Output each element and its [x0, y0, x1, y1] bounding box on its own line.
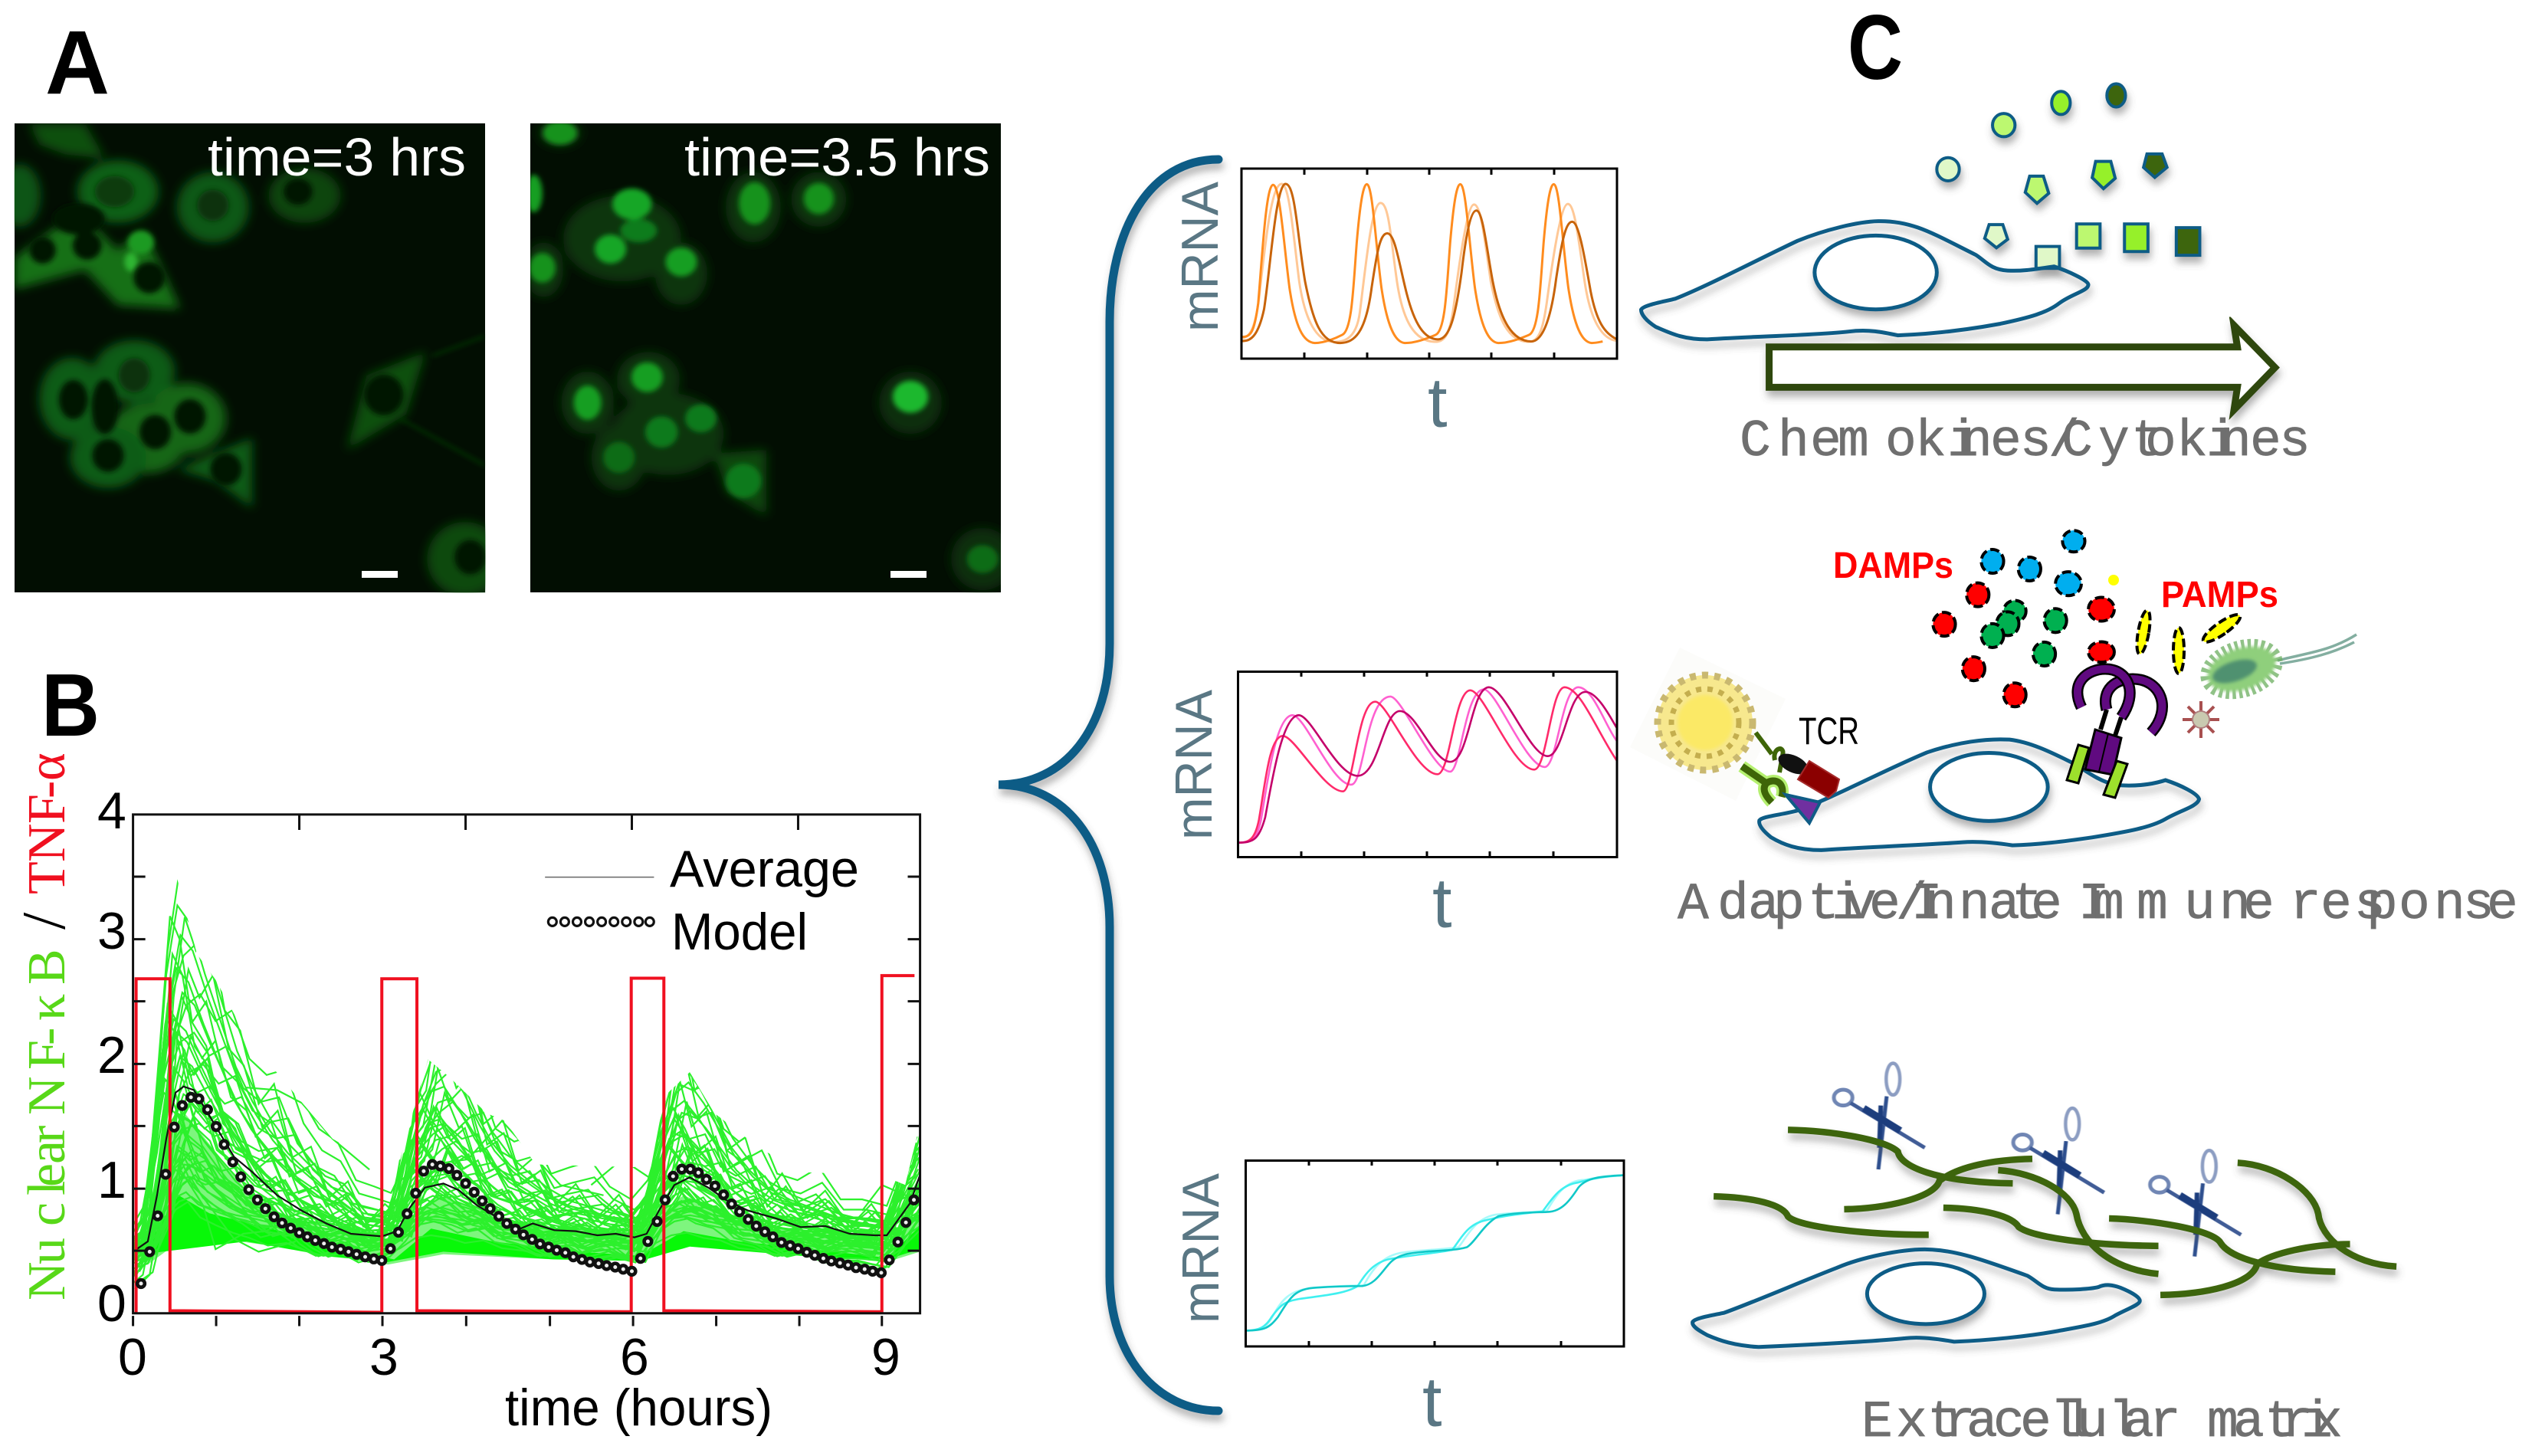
chart: nuclear NF-kB single cell traces: [97, 782, 933, 1437]
y axis label: NuclearNF-κB: [18, 949, 77, 1300]
legend swatch average: [545, 877, 654, 878]
y axis label: TNF-α: [18, 753, 77, 894]
y tick labels: 4: [97, 782, 126, 840]
x label: t: [1432, 864, 1452, 943]
panel: micrograph at 3.5 hours: [524, 120, 1014, 592]
DAMP particles: [1933, 530, 2114, 707]
x axis title: time (hours): [505, 1379, 772, 1437]
y tick labels: 0: [97, 1274, 126, 1333]
yellow dot: [2108, 575, 2119, 585]
legend text model: Model: [671, 903, 808, 961]
x label: t: [1422, 1363, 1442, 1441]
panel label A: A: [45, 12, 110, 113]
y tick labels: 2: [97, 1026, 126, 1084]
average line: [136, 1087, 920, 1249]
TCR label: TCR: [1799, 710, 1859, 753]
chart: mRNA cyan: [1172, 1160, 1624, 1441]
arrow: [1769, 326, 2275, 410]
x tick labels: 3: [369, 1328, 398, 1386]
TNF pulses: [136, 976, 914, 1313]
matrix fibres: [1714, 1130, 2396, 1295]
y tick labels: [97, 782, 126, 1333]
legend swatch model: [548, 917, 654, 926]
chemokine shapes: [1937, 84, 2199, 268]
chart: mRNA orange: [1171, 169, 1617, 442]
ticks: [1301, 672, 1553, 857]
x tick labels: 9: [871, 1328, 900, 1386]
legend text average: Average: [670, 840, 859, 898]
single cell traces: [126, 877, 933, 1289]
panel: micrograph at 3 hours: [0, 123, 503, 596]
caption: Chemokines/Cytokines: [1740, 412, 2311, 471]
panel: chemokines and cytokines: [1641, 84, 2311, 471]
T cell receptor: [1742, 733, 1839, 823]
cell outline: [1760, 739, 2199, 850]
panel: adaptive and innate immune response: [1630, 530, 2518, 934]
cell outline: [1641, 221, 2088, 339]
scissors: [1834, 1064, 2241, 1257]
model points: [137, 1094, 917, 1287]
y axis label: [11, 753, 78, 1300]
curly brace: [999, 159, 1218, 1411]
x tick labels: 0: [118, 1328, 147, 1386]
PAMPs label: PAMPs: [2161, 575, 2278, 615]
ticks: [1304, 169, 1554, 359]
caption: Extracellular matrix: [1861, 1393, 2343, 1452]
chart: mRNA pink: [1165, 671, 1617, 943]
scale bar: [890, 571, 927, 578]
y axis label: /: [11, 912, 78, 930]
scale bar: [362, 571, 398, 578]
axes frame: [1246, 1160, 1624, 1346]
axes frame and ticks: [133, 815, 920, 1326]
y label: mRNA: [1171, 181, 1229, 332]
y tick labels: 3: [97, 902, 126, 960]
innate receptor: [2067, 669, 2163, 798]
ticks: [1309, 1161, 1561, 1346]
virus: [2183, 701, 2219, 738]
antigen presenting cell: [1630, 648, 1786, 801]
panel label B: B: [41, 655, 100, 755]
x label: t: [1428, 364, 1448, 442]
caption: Adaptive/Innate Immune response: [1678, 875, 2518, 934]
label: time 3 hrs: time=3 hrs: [208, 127, 466, 187]
PAMP particles: [2134, 609, 2243, 674]
x tick labels: [118, 1328, 900, 1386]
y label: mRNA: [1165, 689, 1223, 840]
panel: extracellular matrix: [1693, 1064, 2396, 1452]
y tick labels: 1: [97, 1151, 126, 1209]
axes frame: [1238, 671, 1617, 857]
x tick labels: 6: [620, 1328, 649, 1386]
axes frame: [1241, 169, 1617, 359]
DAMPs label: DAMPs: [1833, 546, 1953, 586]
label: time 3.5 hrs: time=3.5 hrs: [684, 127, 990, 187]
y label: mRNA: [1172, 1172, 1230, 1323]
cell outline: [1693, 1249, 2140, 1347]
bacterium: [2202, 635, 2357, 700]
